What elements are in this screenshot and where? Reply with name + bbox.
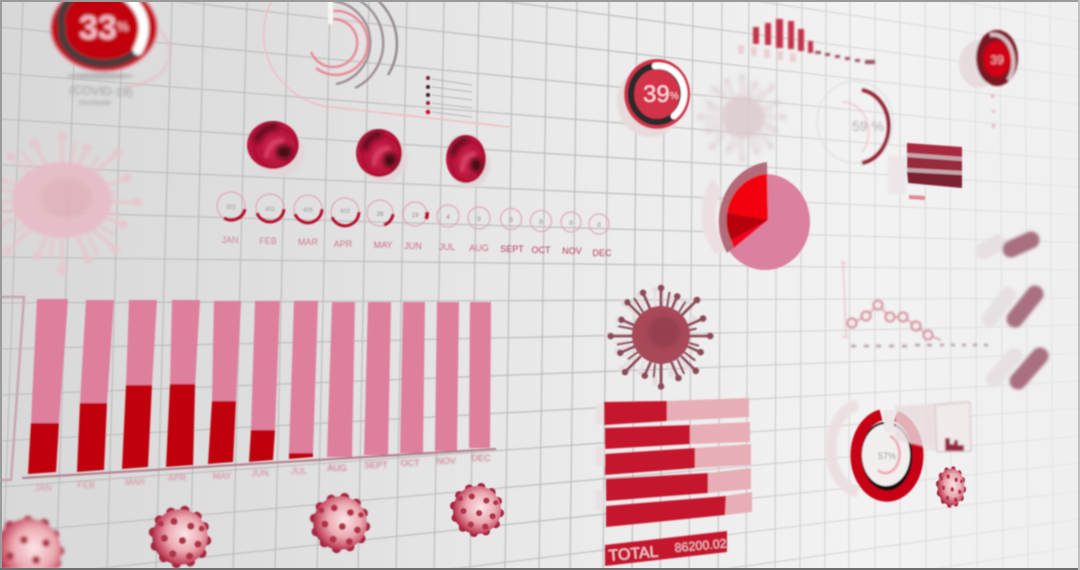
bar chart month labels: AUG [327, 463, 347, 473]
pie chart [701, 162, 810, 270]
bar chart month labels: JUN [251, 468, 269, 478]
horizontal progress bars [596, 398, 752, 566]
virus 3 [310, 493, 370, 553]
ring NOV: 0 [569, 221, 573, 227]
pie shadow [701, 178, 728, 255]
gauge value: 59 % [852, 118, 884, 134]
bar chart month labels: SEPT [364, 460, 388, 470]
ring NOV [561, 212, 581, 232]
bottom viruses [0, 483, 504, 569]
ring SEPT [500, 208, 522, 230]
bar chart month labels [34, 453, 491, 493]
ring AUG [468, 207, 490, 229]
ring month labels: MAR [298, 237, 318, 247]
ring gauge 57% [831, 405, 918, 496]
ring month labels: APR [334, 239, 353, 249]
ring DEC [589, 214, 609, 234]
red ring [856, 415, 918, 496]
top mini bar chart [738, 19, 875, 64]
line chart right [841, 262, 988, 346]
ring JAN [217, 192, 245, 220]
bar tracks [667, 398, 752, 515]
white centre [862, 424, 910, 486]
dotted list [426, 76, 472, 117]
donut body [624, 59, 690, 129]
ring month labels: JUL [439, 242, 455, 252]
gauge value: 57% [878, 451, 896, 461]
bar chart month labels: NOV [436, 456, 456, 466]
ring JUN [403, 202, 427, 226]
bar chart month labels: JAN [34, 483, 52, 493]
central spiked virus [605, 285, 714, 390]
axis [841, 262, 848, 337]
bar chart month labels: DEC [471, 453, 491, 463]
monthly progress rings [217, 192, 609, 234]
ring month labels: NOV [562, 246, 582, 256]
value 33%: % [117, 19, 129, 34]
bar chart month labels: MAR [125, 477, 146, 487]
data line [852, 305, 941, 340]
left shadow strips [596, 404, 604, 510]
bar chart month labels: APR [168, 473, 187, 483]
small virus bottom right [936, 466, 966, 508]
red bar fills [28, 384, 313, 474]
ring SEPT: 0 [509, 218, 513, 224]
blurred slug shapes [984, 240, 1040, 381]
black ring [859, 422, 913, 492]
slug 3 [994, 356, 1040, 381]
ring APR [331, 198, 359, 226]
ring month labels: OCT [532, 245, 551, 255]
ring FEB: 401 [265, 207, 276, 213]
ring month labels: FEB [259, 236, 277, 246]
pie base [720, 174, 810, 270]
cell 1 [247, 121, 305, 176]
ring month labels: JAN [221, 235, 239, 245]
bar chart month labels: FEB [77, 480, 95, 490]
caption under 33% donut: Worldwide [79, 100, 111, 107]
ring month labels: DEC [592, 248, 612, 258]
value 39%: % [670, 91, 679, 102]
ring month labels: SEPT [500, 244, 524, 254]
ring OCT [530, 210, 552, 232]
inner pink arc [878, 436, 900, 473]
ring DEC: 0 [597, 223, 601, 229]
ring month labels: JUN [404, 241, 422, 251]
cell 2 [356, 129, 407, 183]
semi gauge 59% [817, 81, 893, 163]
ring JUN: 19 [412, 213, 419, 219]
striped table panel [888, 143, 962, 200]
ring month labels [221, 235, 612, 258]
ring MAR: 405 [303, 208, 314, 214]
small chart panel [895, 401, 972, 452]
total label panel: 86200.02 [674, 536, 727, 555]
virus 1 [0, 516, 64, 569]
ring MAY: 39 [377, 212, 384, 218]
ring OCT: 0 [539, 220, 543, 226]
virus 4 [450, 483, 504, 537]
cell 3 [446, 135, 490, 188]
left bracket [1, 297, 24, 480]
bright sector [727, 174, 768, 220]
ring AUG: 0 [477, 217, 481, 223]
ring MAR [294, 195, 322, 223]
slug 1 [984, 240, 1031, 251]
ring month labels: MAY [374, 240, 392, 250]
bar chart month labels: OCT [400, 458, 420, 468]
ring JUL: 4 [446, 215, 450, 221]
ring month labels: AUG [469, 243, 489, 253]
donut body [51, 0, 157, 71]
table shadow [888, 156, 906, 194]
virus 2 [149, 506, 211, 568]
pink bar tracks [31, 299, 491, 457]
donut: 39% [617, 59, 690, 137]
slug 2 [990, 294, 1035, 319]
bar chart month labels: JUL [291, 466, 307, 476]
donut shadow [125, 30, 170, 87]
bar fills [604, 401, 726, 527]
faint virus left [0, 132, 142, 275]
donut shadow [617, 67, 683, 137]
ring MAY [367, 200, 393, 226]
donut body [976, 30, 1018, 86]
total label panel [605, 531, 727, 566]
total label panel: TOTAL [608, 544, 659, 565]
donut: 33% [51, 0, 170, 87]
bar chart month labels: MAY [213, 471, 231, 481]
chart axis [22, 449, 496, 478]
faint virus centre [697, 74, 786, 162]
gauge shadow [831, 405, 858, 492]
ring JAN: 302 [226, 205, 237, 211]
caption under 33% donut [69, 83, 133, 107]
ring FEB [256, 194, 284, 222]
ring APR: 403 [340, 209, 351, 215]
small donut top right [959, 30, 1018, 128]
dark sector [727, 213, 768, 240]
donut shadow [959, 40, 999, 88]
blood cells [247, 121, 490, 188]
value: 39 [990, 53, 1004, 67]
outer sector [719, 162, 768, 253]
monthly stacked bar chart [22, 299, 496, 478]
concentric arcs dial [264, 0, 510, 127]
value 33%: 33 [79, 9, 117, 47]
value 39%: 39 [643, 81, 670, 108]
ring JUL [437, 205, 459, 227]
outer frame curve [264, 0, 510, 127]
caption under 33% donut: (COVID-19) [69, 83, 133, 99]
